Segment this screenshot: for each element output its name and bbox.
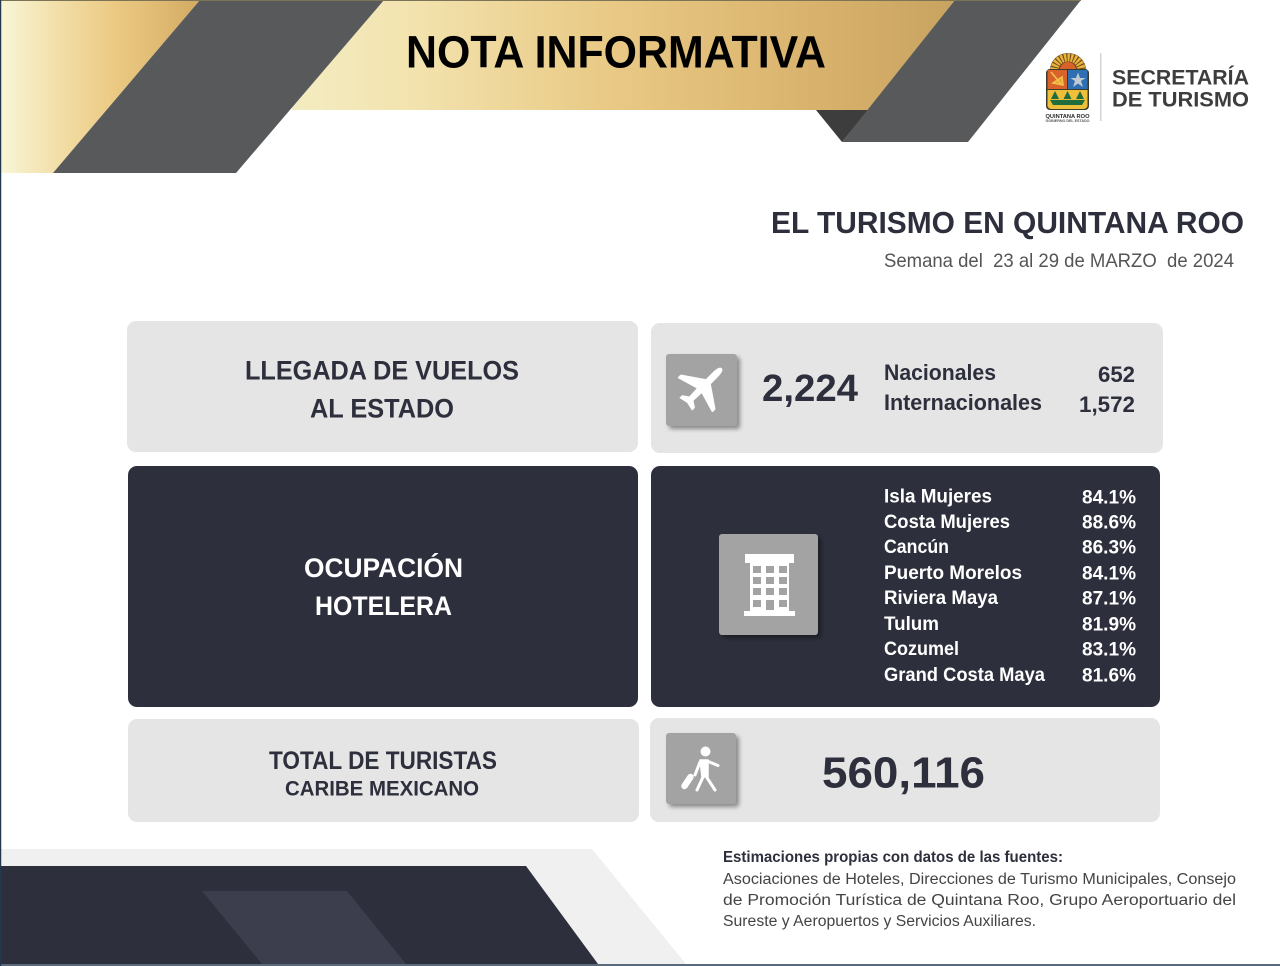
occupancy table: 84.1% <box>1082 486 1136 508</box>
flights breakdown: Nacionales <box>884 360 996 385</box>
panel: hotel occupancy data <box>651 466 1160 707</box>
occupancy table: 87.1% <box>1082 588 1136 610</box>
occupancy table: 81.9% <box>1082 614 1136 636</box>
occupancy table: Cozumel <box>884 638 959 660</box>
emblem shield <box>1046 69 1089 110</box>
occupancy table: Costa Mujeres <box>884 511 1010 533</box>
occupancy table: 81.6% <box>1082 664 1136 686</box>
icon: traveller with suitcase <box>666 733 736 804</box>
occupancy table: 86.3% <box>1082 536 1136 558</box>
grey stripe left <box>53 0 384 173</box>
icon: airplane <box>666 351 739 426</box>
occupancy heading <box>304 552 463 621</box>
sources note: Asociaciones de Hoteles, Direcciones de Turismo Municipales, Consejo <box>723 871 1236 888</box>
flights heading <box>245 356 519 424</box>
panel: tourists data <box>650 718 1160 822</box>
tourists heading <box>269 747 497 800</box>
sources note <box>723 849 1236 930</box>
occupancy table: 83.1% <box>1082 638 1136 660</box>
flights breakdown: 652 <box>1098 362 1135 387</box>
sources note: Sureste y Aeropuertos y Servicios Auxiliares. <box>723 913 1036 930</box>
date line: Semana del 23 al 29 de MARZO de 2024 <box>884 250 1234 272</box>
tourists heading: TOTAL DE TURISTAS <box>269 747 497 775</box>
grey stripe right <box>842 0 1081 142</box>
logo divider <box>1100 53 1102 121</box>
emblem sub-caption: GOBIERNO DEL ESTADO <box>1046 119 1090 123</box>
emblem caption: QUINTANA ROO <box>1046 114 1090 120</box>
occupancy table: 84.1% <box>1082 562 1136 584</box>
total tourists: 560,116 <box>822 748 985 798</box>
logo: Quintana Roo tourism <box>1046 53 1249 123</box>
panel: tourists label <box>128 719 639 822</box>
dark fold triangle <box>816 110 868 142</box>
panel: hotel occupancy label <box>128 466 638 707</box>
logo wordmark line 2: DE TURISMO <box>1112 88 1249 112</box>
gold band centre <box>292 0 955 110</box>
flights heading: LLEGADA DE VUELOS <box>245 356 519 386</box>
occupancy table: Grand Costa Maya <box>884 664 1045 686</box>
title: NOTA INFORMATIVA <box>406 26 826 78</box>
flights heading: AL ESTADO <box>310 394 454 424</box>
logo wordmark line 1: SECRETARÍA <box>1112 66 1249 90</box>
footer shapes <box>0 849 686 964</box>
occupancy table: Isla Mujeres <box>884 486 992 508</box>
emblem sun <box>1050 53 1086 70</box>
total flights: 2,224 <box>762 368 858 410</box>
top edge line <box>0 0 1081 1</box>
occupancy table: 88.6% <box>1082 512 1136 534</box>
occupancy heading: OCUPACIÓN <box>304 552 463 583</box>
occupancy table: Cancún <box>884 536 949 558</box>
occupancy table: Tulum <box>884 613 939 635</box>
panel: flights data <box>651 323 1163 453</box>
header banner <box>0 0 1081 173</box>
tourists heading: CARIBE MEXICANO <box>285 778 479 800</box>
sources note: de Promoción Turística de Quintana Roo, Grupo Aeroportuario del <box>723 892 1236 909</box>
flights breakdown: Internacionales <box>884 390 1042 415</box>
occupancy table: Puerto Morelos <box>884 562 1022 584</box>
subtitle: EL TURISMO EN QUINTANA ROO <box>771 205 1244 240</box>
icon: hotel building <box>719 534 818 635</box>
occupancy table <box>884 486 1136 686</box>
panel: flights label <box>127 321 638 452</box>
occupancy heading: HOTELERA <box>315 591 452 621</box>
flights breakdown: 1,572 <box>1079 392 1135 417</box>
flights breakdown <box>884 360 1135 417</box>
occupancy table: Riviera Maya <box>884 587 998 609</box>
gold band left <box>0 0 200 173</box>
sources note: Estimaciones propias con datos de las fuentes: <box>723 849 1063 866</box>
